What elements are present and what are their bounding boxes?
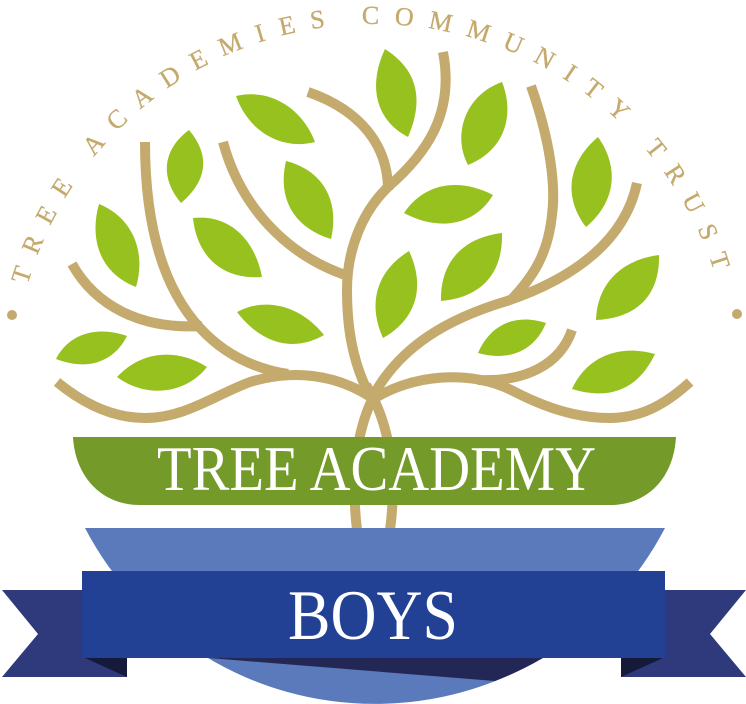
left dot: [7, 310, 17, 320]
ribbon main band: [82, 571, 665, 658]
bowl shadow fold: [209, 658, 543, 681]
tree branches: [57, 52, 690, 530]
academy name: TREE ACADEMY: [157, 433, 596, 504]
ribbon left fold: [85, 658, 127, 677]
ribbon right tail: [621, 590, 746, 677]
blue bowl: [85, 528, 665, 704]
tree leaves: [56, 49, 659, 393]
label: Boys: BOYS: [288, 577, 458, 655]
ribbon right fold: [621, 658, 663, 677]
arc heading: Tree Academies Community Trust: TREE ACADEMIES COMMUNITY TRUST: [11, 6, 730, 282]
ribbon: [2, 571, 746, 681]
ribbon left tail: [2, 590, 127, 677]
green band: Tree Academy: [73, 433, 676, 505]
right dot: [732, 309, 742, 319]
